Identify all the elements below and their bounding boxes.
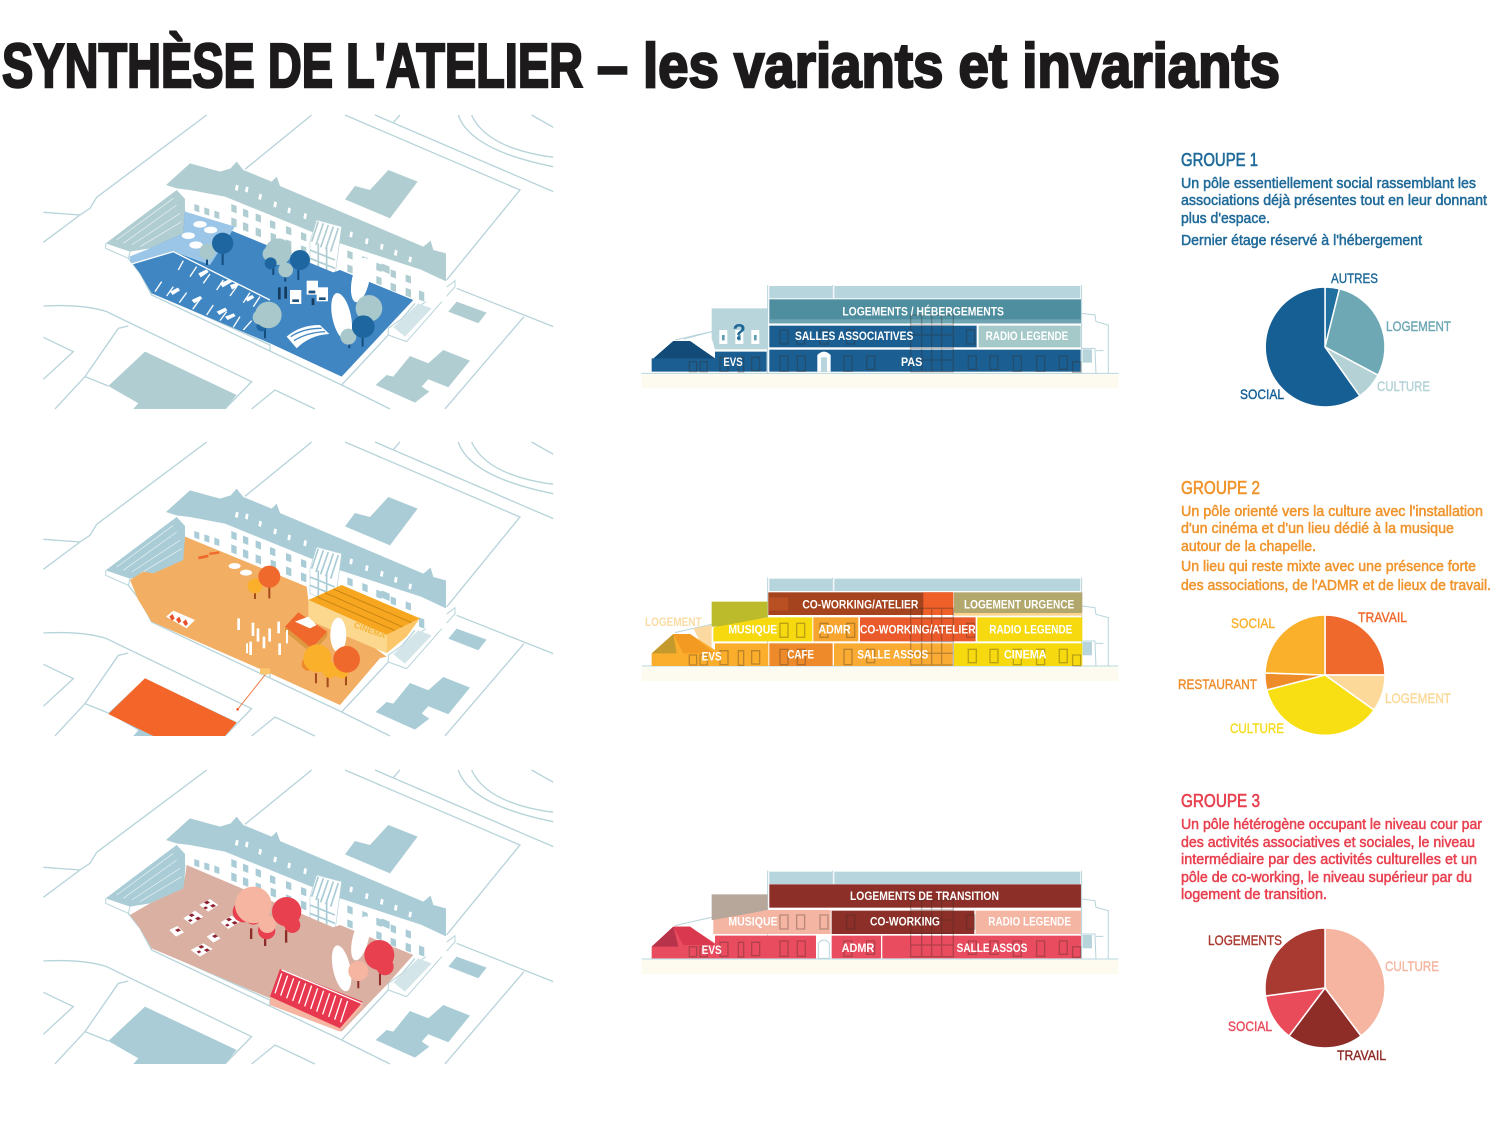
section diagram: groupe 1: RADIO LEGENDE [986,329,1068,343]
pie chart: groupe 2: CULTURE [1230,720,1284,736]
section diagram: groupe 3: LOGEMENTS DE TRANSITION [850,889,999,903]
co-working top [768,592,953,615]
text block: groupe 3: des activités associatives et sociales, le niveau [1181,835,1475,851]
text block: groupe 1: Dernier étage réservé à l'hébergement [1181,233,1422,249]
radio legende [976,911,1081,934]
pie chart: groupe 1: LOGEMENT [1386,318,1451,334]
crowd [237,618,288,655]
EVS house [652,634,768,666]
bench [287,325,329,348]
text block: groupe 2 [1181,478,1491,594]
pie chart: groupe 3: TRAVAIL [1337,1047,1386,1063]
musique [713,910,831,934]
arrow [236,667,272,711]
radio legende [977,617,1082,641]
door [817,352,831,372]
ADMR [832,936,881,958]
musicians [198,551,219,559]
EVS house [652,341,767,372]
terrace area [129,212,235,265]
door [818,940,829,958]
text block: groupe 1: associations déjà présentes tout en leur donnant [1181,193,1487,209]
salles associatives [769,326,977,347]
logements de transition [769,884,1081,908]
section diagram: groupe 1 [642,285,1118,388]
market stalls [290,281,328,304]
section diagram: groupe 2: EVS [702,650,722,664]
trees [248,566,360,687]
parking lines [132,252,270,330]
people [278,287,314,305]
title: les variants et invariants [643,32,1280,101]
section diagram: groupe 1: LOGEMENTS / HÉBERGEMENTS [842,304,1004,319]
text block: groupe 1 [1181,150,1487,249]
stage with piano [285,612,327,653]
text block: groupe 3 [1181,791,1482,903]
text block: groupe 2: autour de la chapelle. [1181,539,1316,555]
salle assos [834,643,953,666]
parasols [182,221,217,249]
section diagram: groupe 1: ? [732,319,746,344]
pie chart: groupe 3 [1208,928,1439,1063]
section diagram: groupe 2: ADMR [818,622,851,636]
section diagram: groupe 2: LOGEMENT URGENCE [964,597,1074,611]
upper volume [712,894,768,920]
section diagram: groupe 2: MUSIQUE [728,622,777,636]
trees [199,233,382,348]
cinema [308,585,420,653]
salle assos [882,936,1081,958]
text block: groupe 1: plus d'espace. [1181,211,1270,227]
text block: groupe 2: Un pôle orienté vers la culture avec l'installation [1181,504,1483,520]
greenhouse [270,969,363,1032]
text block: groupe 3: intermédiaire par des activités culturelles et un [1181,852,1477,868]
text block: groupe 3: pôle de co-working, le niveau supérieur par du [1181,870,1472,886]
pie chart: groupe 1 [1240,270,1451,407]
section diagram: groupe 3: EVS [702,943,722,957]
section diagram: groupe 2: LOGEMENT [645,615,702,629]
pie chart: groupe 1: SOCIAL [1240,386,1284,402]
co-working [832,911,974,934]
section diagram: groupe 1: PAS [901,355,922,369]
pie chart: groupe 2 [1178,609,1451,736]
pie chart: groupe 1: AUTRES [1331,270,1378,286]
section diagram: groupe 1: EVS [723,355,743,369]
parasols [229,563,252,576]
section diagram: groupe 2: RADIO LEGENDE [989,622,1072,636]
logement wing [693,625,712,650]
cinema: CINEMA [353,620,388,641]
section diagram: groupe 3: RADIO LEGENDE [988,915,1071,929]
pie chart: groupe 1: CULTURE [1377,378,1430,394]
pie chart: groupe 2: LOGEMENT [1385,690,1451,706]
text block: groupe 2: Un lieu qui reste mixte avec une présence forte [1181,559,1476,575]
courtyard: blue [130,212,413,377]
text block: groupe 3: logement de transition. [1181,887,1327,903]
section diagram: groupe 3: MUSIQUE [728,915,778,929]
title [2,32,1280,101]
cafe [769,643,833,666]
section diagram: groupe 3: SALLE ASSOS [957,941,1027,955]
PAS [769,350,1081,372]
pie chart: groupe 3: SOCIAL [1228,1018,1272,1034]
trees [233,887,394,993]
section diagram: groupe 3: CO-WORKING [870,915,940,929]
axonometric plan: groupe 1 [43,115,553,409]
section diagram: groupe 1: SALLES ASSOCIATIVES [795,329,913,343]
section diagram: groupe 2: CO-WORKING/ATELIER [802,597,919,611]
text block: groupe 1: Un pôle essentiellement social rassemblant les [1181,176,1476,192]
section diagram: groupe 2: CO-WORKING/ATELIER [860,622,976,636]
courtyard: orange [130,537,387,705]
pie chart: groupe 2: SOCIAL [1231,615,1275,631]
title: – [597,32,628,101]
section diagram: groupe 2: CAFE [787,648,814,662]
text block: groupe 3: GROUPE 3 [1181,791,1260,811]
cars [170,269,254,320]
green upper volume [712,602,768,627]
pie chart: groupe 2: TRAVAIL [1358,609,1407,625]
section diagram: groupe 2: SALLE ASSOS [857,648,928,662]
benches [166,611,195,628]
relocated block [108,678,237,736]
pie chart: groupe 2: RESTAURANT [1178,676,1257,692]
text block: groupe 3: Un pôle hétérogène occupant le niveau cour par [1181,817,1482,833]
axonometric plan: groupe 3 [43,770,553,1064]
section diagram: groupe 2 [642,578,1118,681]
section diagram: groupe 3 [642,871,1118,974]
courtyard: paved [130,865,413,1032]
pie chart: groupe 3: LOGEMENTS [1208,932,1282,948]
axonometric plan: groupe 2 [43,442,553,736]
logement urgence [954,592,1082,613]
text block: groupe 2: des associations, de l'ADMR et de lieux de travail. [1181,578,1491,594]
text block: groupe 1: GROUPE 1 [1181,150,1258,170]
text block: groupe 2: GROUPE 2 [1181,478,1260,498]
ADMR [813,617,858,641]
upper floor with question mark [712,308,768,349]
tables [169,899,240,957]
co-working middle [860,617,976,641]
pie chart: groupe 3: CULTURE [1385,958,1439,974]
cinema [954,643,1082,666]
musique [713,617,812,641]
text block: groupe 2: d'un cinéma et d'un lieu dédié à la musique [1181,521,1454,537]
title: SYNTHÈSE DE L'ATELIER [2,32,583,101]
EVS house [652,927,816,958]
section diagram: groupe 3: ADMR [842,941,875,955]
radio legende [979,326,1081,347]
logements band [769,299,1081,323]
section diagram: groupe 2: CINEMA [1004,648,1047,662]
